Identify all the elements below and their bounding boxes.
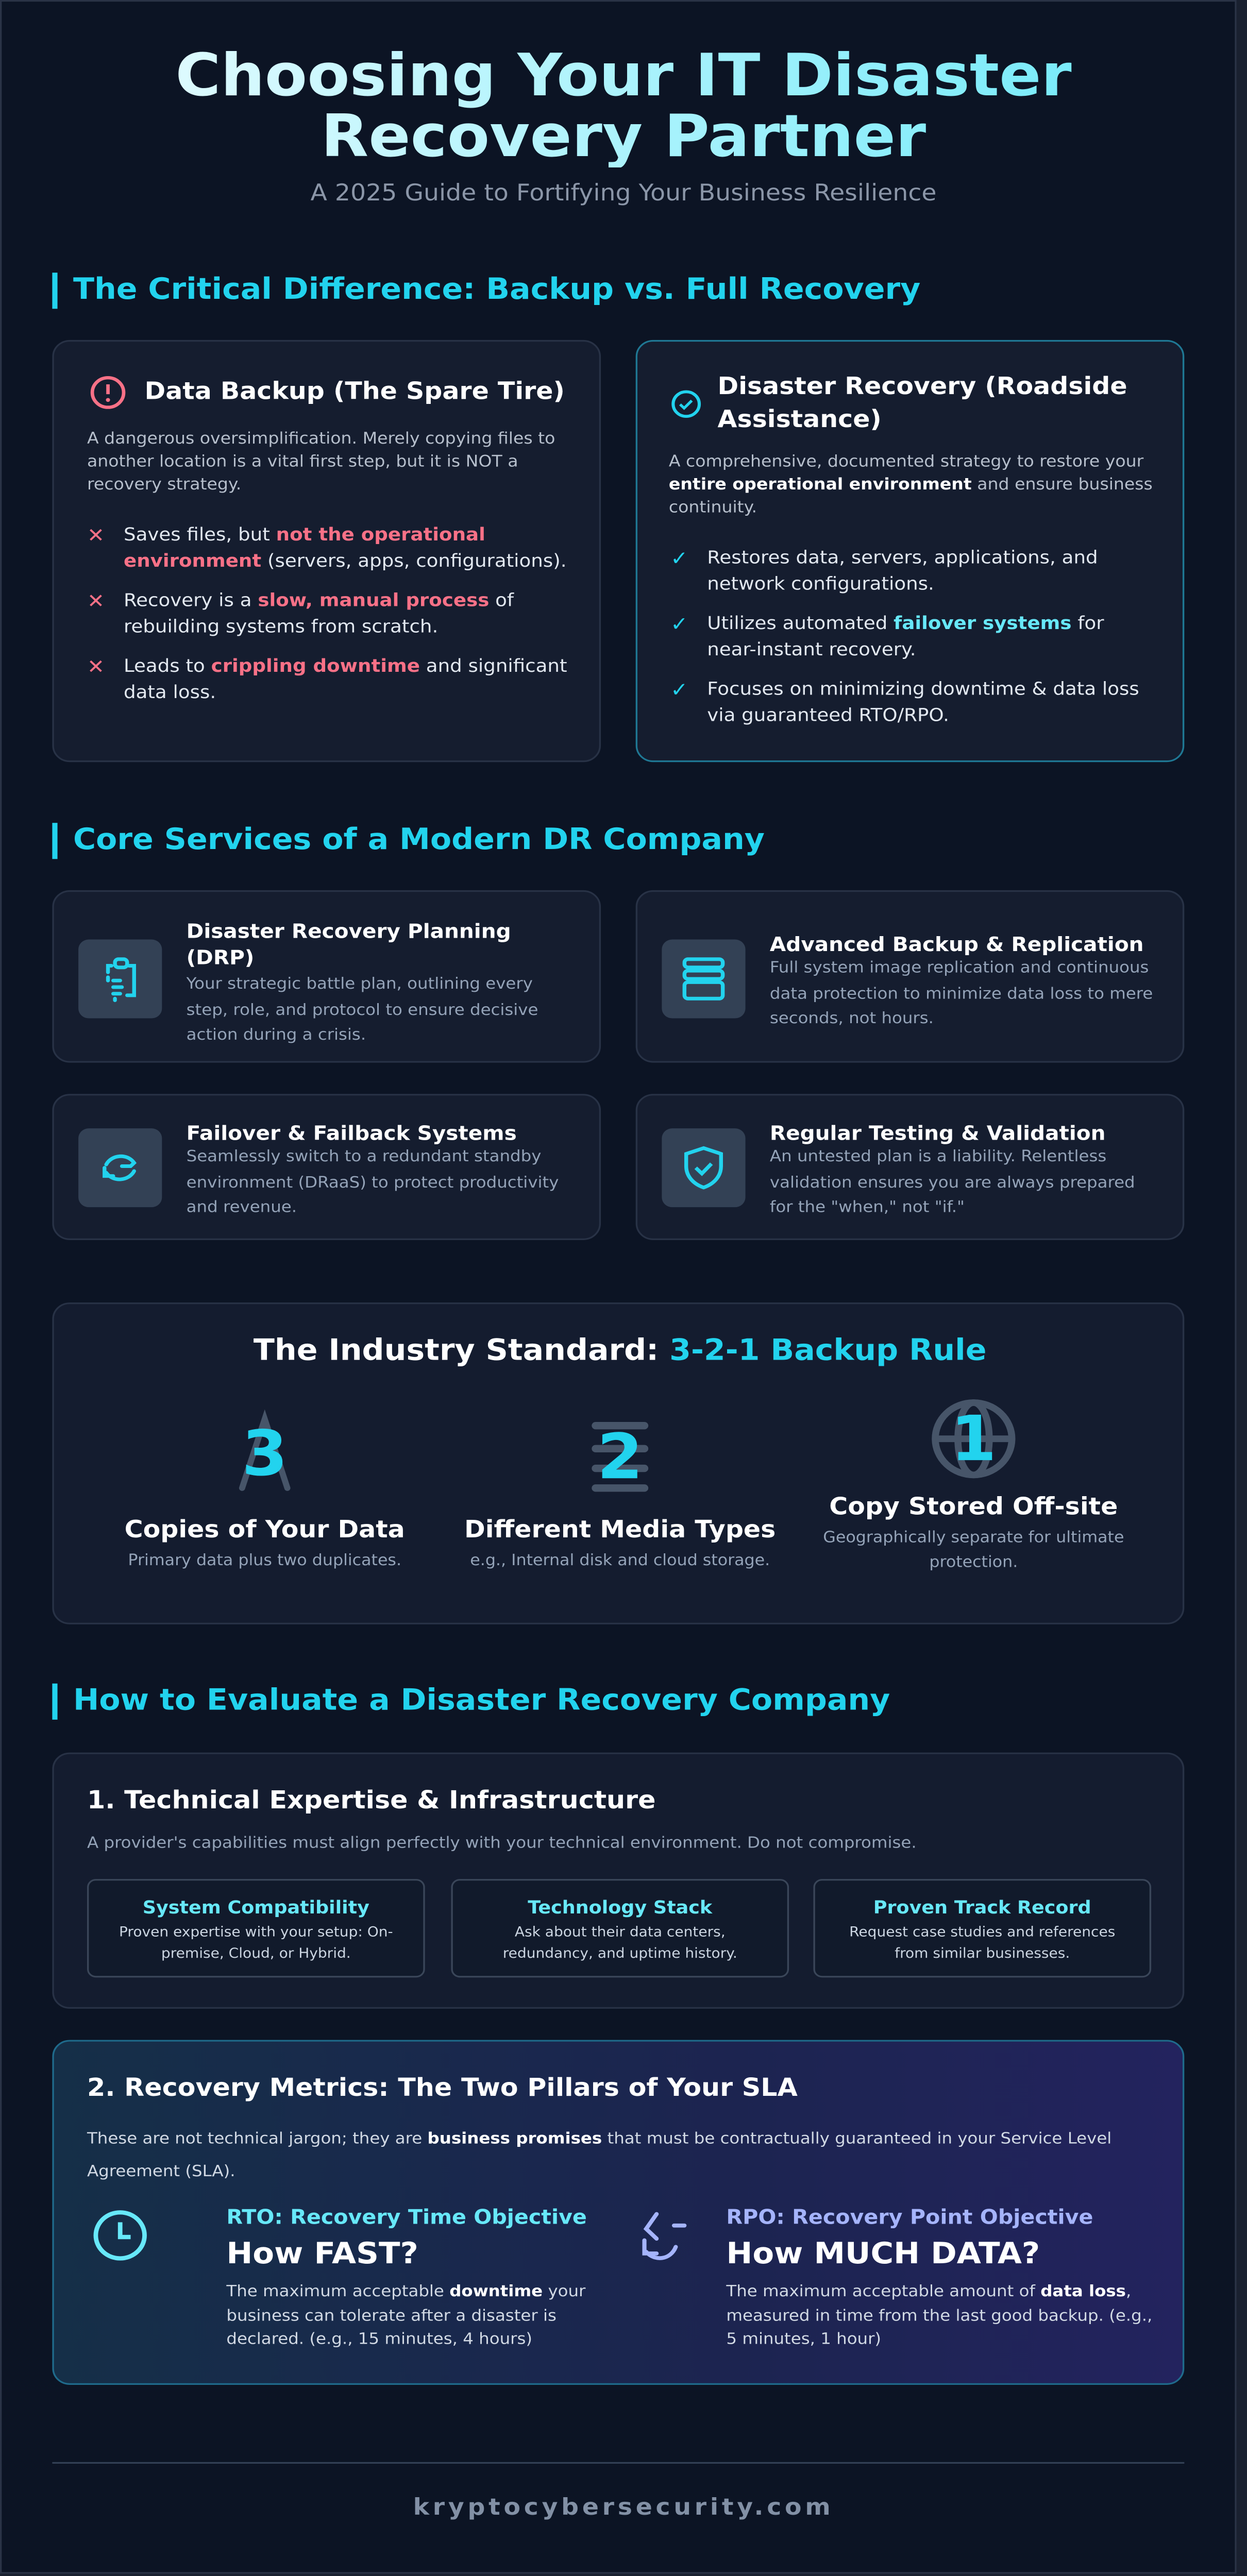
card title: Disaster Recovery (Roadside Assistance) — [718, 375, 1127, 434]
icon: globe 1: 1 — [951, 1403, 997, 1475]
bullet 3: Focuses on minimizing downtime & data loss via guaranteed RTO/RPO. — [707, 679, 1139, 726]
panel: disaster recovery — [636, 340, 1184, 762]
label: Copies of Your Data — [125, 1518, 405, 1544]
panel title: The Industry Standard: 3-2-1 Backup Rule — [254, 1334, 987, 1368]
panel: recovery metrics — [52, 2040, 1184, 2385]
box: compatibility — [87, 1879, 425, 1977]
service desc: Full system image replication and continuous data protection to minimize data loss to mere seconds, not hours. — [770, 959, 1153, 1028]
bullet 2: Utilizes automated failover systems for near-instant recovery. — [707, 613, 1104, 660]
service desc: Seamlessly switch to a redundant standby environment (DRaaS) to protect productivity and revenue. — [187, 1148, 559, 1217]
subtitle: A 2025 Guide to Fortifying Your Business Resilience — [310, 181, 937, 207]
icon: 2: 2 — [597, 1421, 643, 1493]
bullet 2: Recovery is a slow, manual process of rebuilding systems from scratch. — [124, 589, 514, 637]
panel: service DRP — [52, 890, 601, 1063]
box: compatibility: System Compatibility — [143, 1897, 369, 1919]
label: Copy Stored Off-site — [829, 1495, 1118, 1521]
panel: disaster recovery: ✓ — [670, 613, 688, 636]
panel title: 1. Technical Expertise & Infrastructure — [87, 1785, 656, 1815]
box: track record — [813, 1879, 1151, 1977]
panel: data backup — [52, 340, 601, 762]
service desc: An untested plan is a liability. Relentless validation ensures you are always prepared for the "when," not "if." — [770, 1148, 1135, 1217]
box: track record: Request case studies and references — [849, 1923, 1115, 1940]
card title: Data Backup (The Spare Tire) — [145, 379, 565, 405]
panel: data backup: ✕ — [87, 589, 105, 613]
box: track record: Proven Track Record — [873, 1897, 1091, 1919]
card description: A comprehensive, documented strategy to restore your entire operational environment and ensure business continuity. — [669, 453, 1153, 517]
icon: rpo — [642, 2212, 686, 2260]
box: tech stack — [451, 1879, 789, 1977]
panel: service backup — [636, 890, 1184, 1063]
column 1: Geographically separate for ultimate protection. — [823, 1529, 1124, 1571]
service title: Disaster Recovery Planning (DRP) — [187, 920, 511, 969]
RPO: How MUCH DATA? — [726, 2237, 1040, 2272]
title: Recovery Partner — [321, 104, 926, 171]
service desc: Your strategic battle plan, outlining every step, role, and protocol to ensure decisive action during a crisis. — [187, 976, 538, 1045]
footer: kryptocybersecurity.com — [413, 2495, 834, 2521]
service title: Advanced Backup & Replication — [770, 933, 1144, 956]
bullet 3: Leads to crippling downtime and significant data loss. — [124, 655, 567, 703]
box: tech stack: redundancy, and uptime history. — [503, 1945, 737, 1961]
icon: clock — [94, 2210, 147, 2261]
panel: disaster recovery: ✓ — [670, 679, 688, 701]
title: Choosing Your IT Disaster — [175, 43, 1072, 110]
icon: warning — [91, 376, 126, 409]
RTO — [94, 2206, 587, 2349]
RPO: The maximum acceptable amount of data loss, measured in time from the last good backup. (e.g., 5 minutes, 1 hour) — [726, 2283, 1152, 2349]
service title: Failover & Failback Systems — [187, 1122, 517, 1145]
panel: service testing — [636, 1094, 1184, 1240]
label: Different Media Types — [464, 1518, 776, 1544]
box: tech stack: Technology Stack — [528, 1897, 712, 1919]
service title: Regular Testing & Validation — [770, 1122, 1105, 1145]
icon: database — [662, 940, 746, 1019]
box: tech stack: Ask about their data centers, — [515, 1923, 726, 1940]
heading: core services: Core Services of a Modern DR Company — [73, 823, 765, 857]
column 3 — [125, 1410, 405, 1570]
panel: data backup: ✕ — [87, 655, 105, 679]
panel desc: These are not technical jargon; they are business promises that must be contractually guaranteed in your Service Level Agreement (SLA). — [87, 2130, 1111, 2181]
label: RTO: Recovery Time Objective — [226, 2206, 587, 2229]
box: track record: from similar businesses. — [895, 1945, 1070, 1961]
RTO: The maximum acceptable downtime your business can tolerate after a disaster is declared. (e.g., 15 minutes, 4 hours) — [226, 2283, 585, 2349]
icon: 3: 3 — [242, 1417, 288, 1490]
icon: check circle — [671, 391, 701, 418]
box: compatibility: Proven expertise with your setup: On- — [119, 1923, 393, 1940]
RPO — [642, 2206, 1152, 2349]
bullet 1: Saves files, but not the operational environment (servers, apps, configurations). — [124, 524, 567, 571]
column 2 — [464, 1421, 776, 1570]
icon: clipboard — [78, 940, 162, 1019]
label: RPO: Recovery Point Objective — [726, 2206, 1093, 2229]
heading: critical difference: The Critical Difference: Backup vs. Full Recovery — [73, 273, 920, 307]
panel: data backup: ✕ — [87, 524, 105, 547]
card description: A dangerous oversimplification. Merely copying files to another location is a vital first step, but it is NOT a recovery strategy. — [87, 430, 555, 495]
column 3: Primary data plus two duplicates. — [128, 1552, 401, 1570]
box: compatibility: premise, Cloud, or Hybrid. — [161, 1945, 351, 1961]
panel: 3-2-1 rule — [52, 1302, 1184, 1624]
icon: sync — [78, 1128, 162, 1207]
icon: globe 1 — [932, 1399, 1015, 1479]
panel desc: A provider's capabilities must align perfectly with your technical environment. Do not compromise. — [87, 1835, 917, 1853]
RTO: How FAST? — [226, 2237, 418, 2272]
heading: evaluate: How to Evaluate a Disaster Recovery Company — [73, 1684, 890, 1718]
panel: technical expertise — [52, 1753, 1184, 2009]
icon: shield — [662, 1128, 746, 1207]
bullet 1: Restores data, servers, applications, and network configurations. — [707, 547, 1098, 595]
column 1 — [823, 1399, 1124, 1571]
title — [0, 46, 1247, 167]
panel title: 2. Recovery Metrics: The Two Pillars of Your SLA — [87, 2073, 798, 2103]
panel: disaster recovery: ✓ — [670, 547, 688, 570]
panel: service failover — [52, 1094, 601, 1240]
column 2: e.g., Internal disk and cloud storage. — [470, 1552, 770, 1570]
